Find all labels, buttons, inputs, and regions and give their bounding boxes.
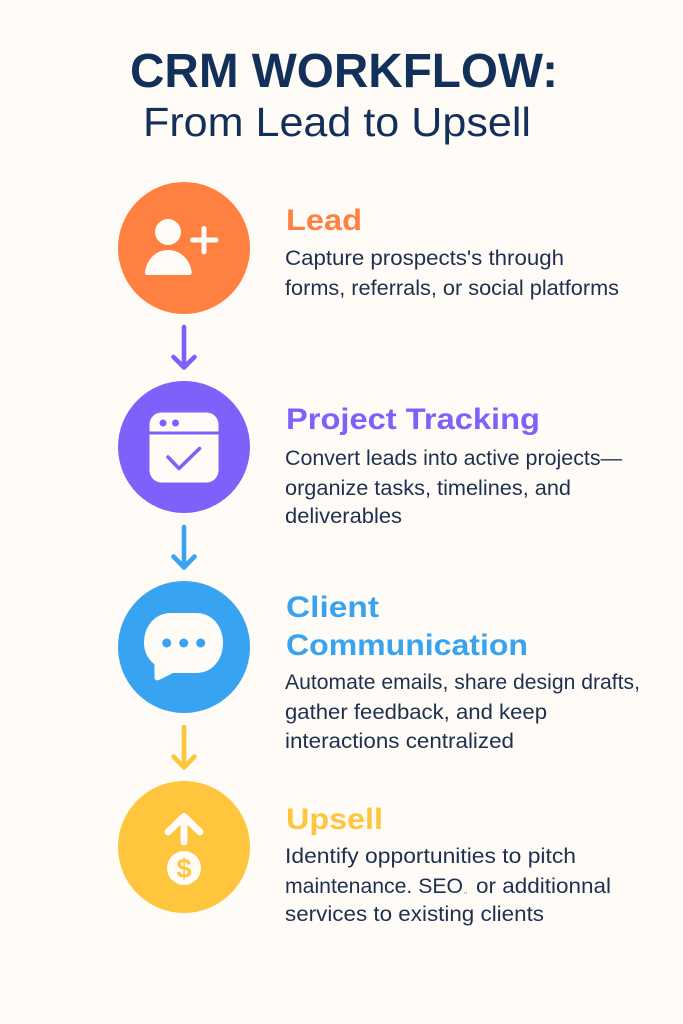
icon: add user [118, 182, 250, 314]
title [130, 45, 558, 145]
description: project tracking [285, 446, 622, 528]
description: lead: Capture prospects's through [285, 246, 564, 270]
description: upsell [285, 844, 611, 926]
description: project tracking: deliverables [285, 504, 402, 528]
description: client communication: interactions centralized [285, 729, 514, 753]
description: client communication: gather feedback, and keep [285, 700, 547, 724]
title: From Lead to Upsell [143, 99, 531, 145]
heading: lead: Lead [286, 204, 362, 237]
arrow: lead to project tracking [174, 327, 194, 368]
step 4: upsell [118, 781, 611, 926]
arrow: project tracking to client communication [174, 527, 194, 568]
icon: upsell arrow and dollar coin [118, 781, 250, 913]
description: upsell: maintenance. SEO [285, 874, 463, 898]
description: client communication: Automate emails, share design drafts, [285, 670, 640, 694]
heading: upsell: Upsell [286, 803, 383, 836]
heading: project tracking: Project Tracking [286, 403, 540, 436]
description: upsell: ,, [464, 889, 468, 895]
step 1: lead [118, 182, 619, 314]
heading: client communication: Communication [286, 629, 528, 662]
description: upsell: or additionnal [476, 874, 611, 898]
icon: upsell arrow and dollar coin: $ [176, 854, 192, 884]
description: project tracking: Convert leads into active projects— [285, 446, 622, 470]
step 3: client communication [118, 581, 640, 753]
title: CRM WORKFLOW: [130, 45, 558, 98]
icon: chat bubble [118, 581, 250, 713]
heading: client communication: Client [286, 591, 379, 624]
heading: client communication [286, 591, 528, 662]
description: lead [285, 246, 619, 300]
description: lead: forms, referrals, or social platforms [285, 276, 619, 300]
step 2: project tracking [118, 381, 622, 528]
description: project tracking: organize tasks, timelines, and [285, 476, 571, 500]
description: upsell: services to existing clients [285, 902, 544, 926]
arrow: client communication to upsell [174, 727, 194, 768]
description: client communication [285, 670, 640, 753]
icon: task window [118, 381, 250, 513]
description: upsell: Identify opportunities to pitch [285, 844, 576, 868]
